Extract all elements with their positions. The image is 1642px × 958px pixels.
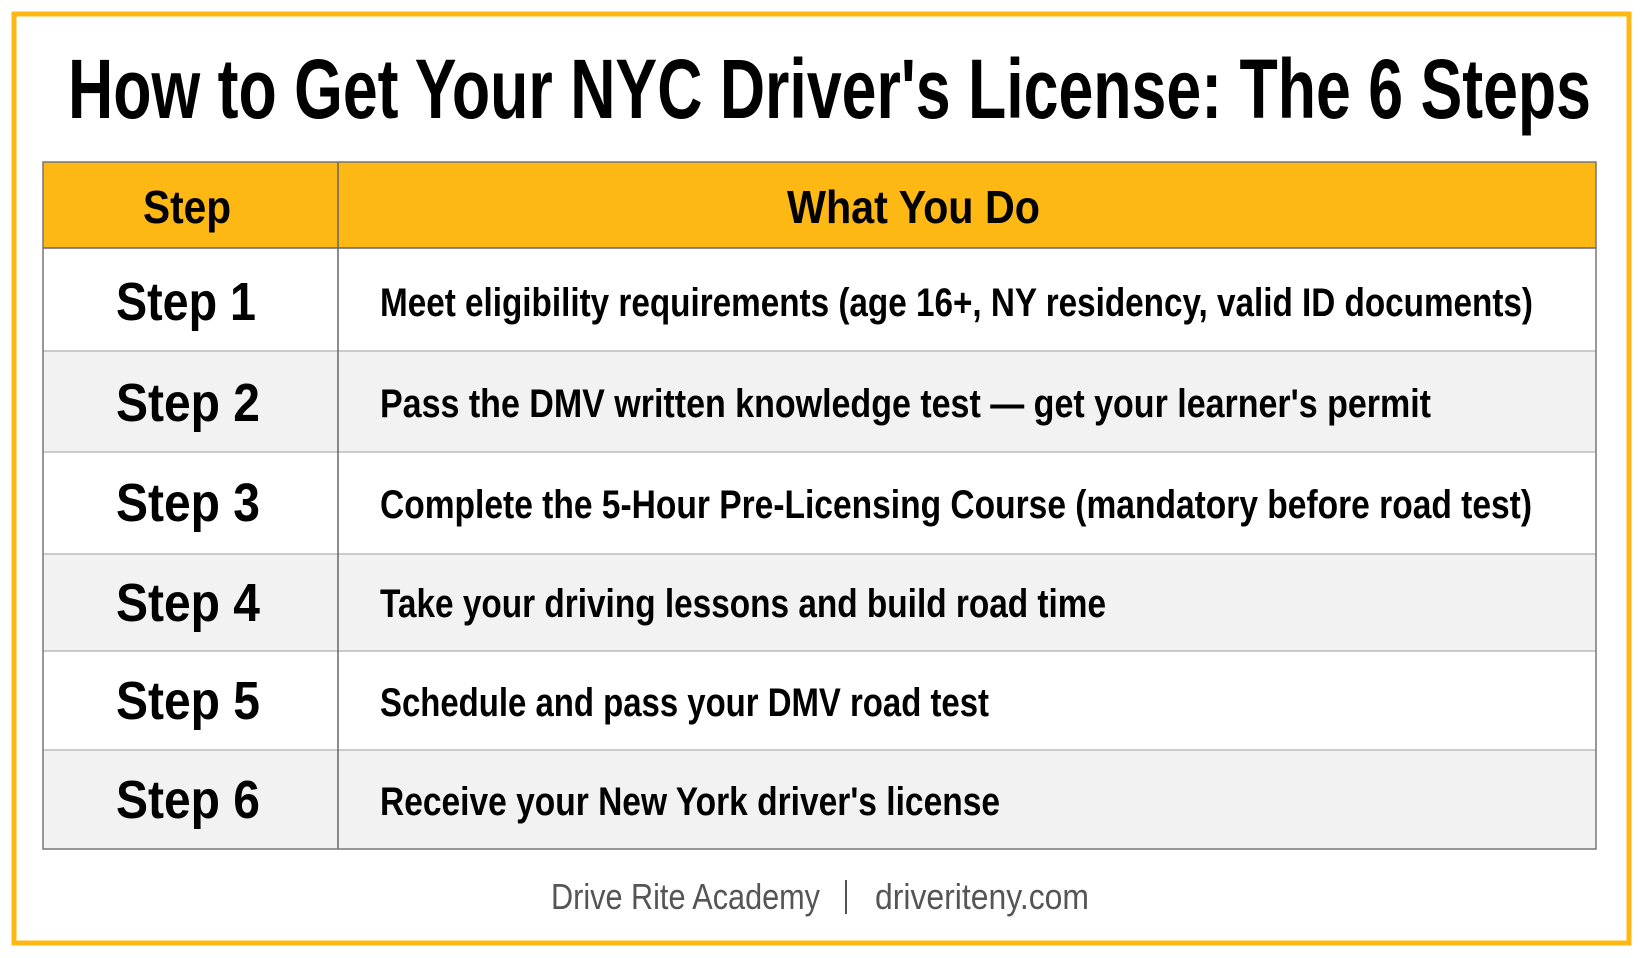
row 5: Step 5: [116, 671, 260, 731]
table: Pass the DMV written knowledge test — get your learner's permit: [380, 382, 1431, 426]
header: Step: Step: [143, 181, 231, 233]
table: Schedule and pass your DMV road test: [380, 681, 989, 725]
table: [43, 162, 1596, 849]
row 2: Step 2: [116, 373, 260, 433]
row 6: Step 6: [116, 770, 260, 830]
table: Receive your New York driver's license: [380, 780, 1000, 824]
header: What You Do: What You Do: [787, 181, 1040, 233]
footer: driveriteny.com: [875, 876, 1089, 917]
footer: Drive Rite Academy: [551, 876, 820, 917]
row 1: Step 1: [116, 272, 256, 332]
row 4: Step 4: [116, 573, 260, 633]
footer: [551, 876, 1089, 917]
row 3: Step 3: [116, 473, 260, 533]
table: Take your driving lessons and build road time: [380, 582, 1106, 626]
